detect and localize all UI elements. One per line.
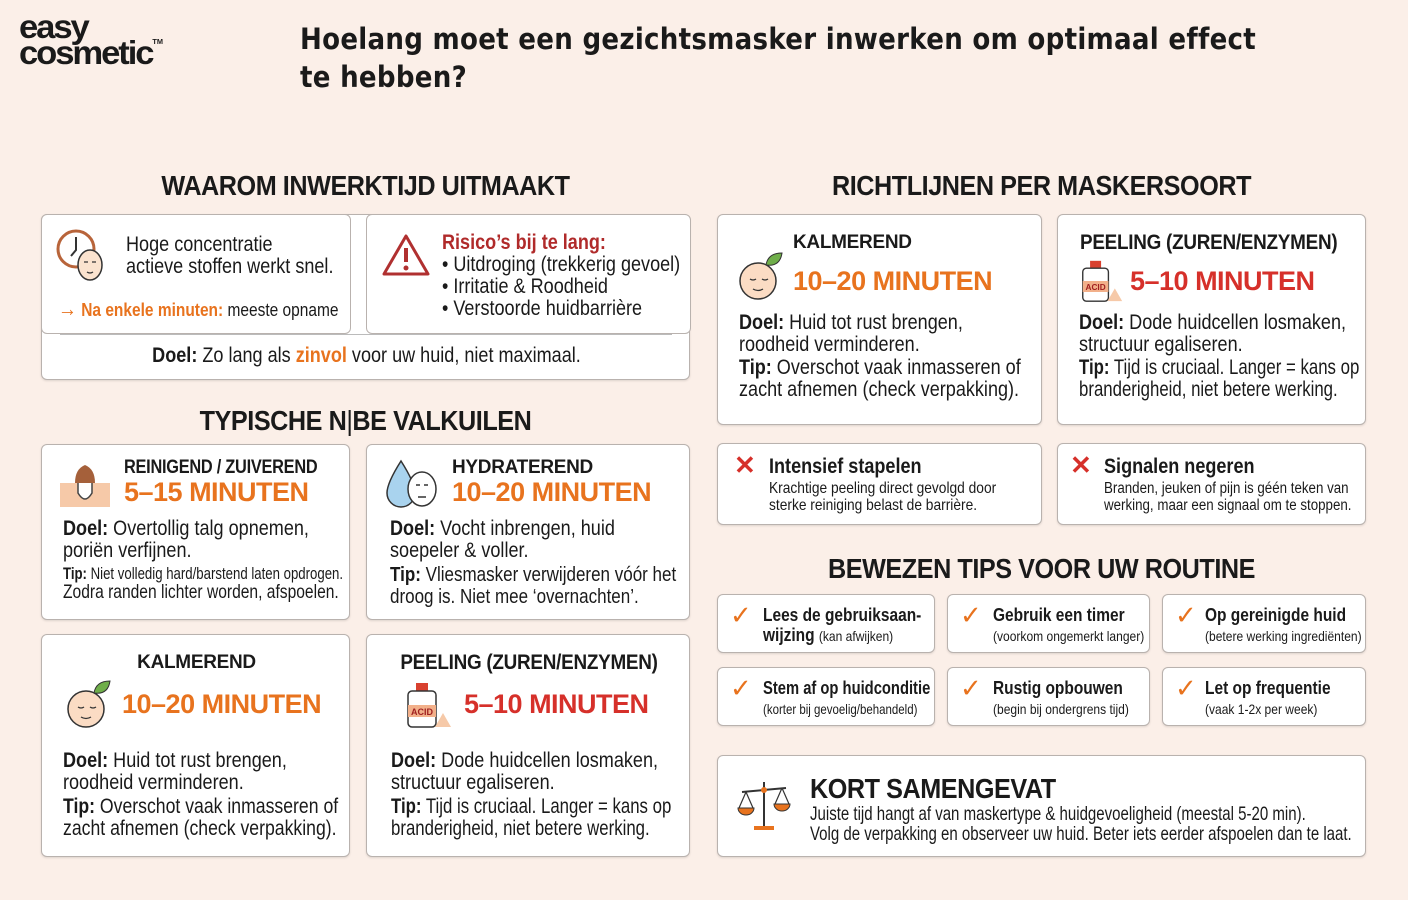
sub-card: concentratie xyxy=(40,214,350,334)
tip 1: ✓ xyxy=(730,601,752,631)
card: kalmerend left: Tip: Overschot vaak inmasseren of xyxy=(63,795,338,818)
card: kalmerend left: KALMEREND xyxy=(137,652,256,673)
tip 6: (vaak 1-2x per week) xyxy=(1205,701,1317,717)
card: reinigend: Zodra randen lichter worden, afspoelen. xyxy=(63,581,339,603)
icon: acid bottle: ACID xyxy=(1085,283,1106,292)
card: peeling left: 5–10 MINUTEN xyxy=(464,689,649,719)
panel: kort samengevat xyxy=(717,755,1366,857)
card: peeling left: Doel: Dode huidcellen losmaken, xyxy=(391,749,658,772)
tip 5: (begin bij ondergrens tijd) xyxy=(993,701,1129,717)
card: reinigend: poriën verfijnen. xyxy=(63,539,192,562)
logo: easy xyxy=(19,8,88,45)
card: hydraterend: 10–20 MINUTEN xyxy=(452,477,651,507)
icon: scales xyxy=(738,782,790,830)
card: kalmerend right: Tip: Overschot vaak inmasseren of xyxy=(739,356,1021,379)
card: intensief stapelen xyxy=(717,443,1042,525)
card: peeling right xyxy=(1057,214,1366,425)
title: Hoelang moet een gezichtsmasker inwerken om optimaal effect xyxy=(300,22,1256,56)
tip 3: (betere werking ingrediënten) xyxy=(1205,628,1362,644)
icon: face with leaf xyxy=(739,252,783,300)
card: peeling left: PEELING (ZUREN/ENZYMEN) xyxy=(400,651,658,674)
card: kalmerend right: zacht afnemen (check verpakking). xyxy=(739,378,1019,401)
tip 6: ✓ xyxy=(1175,674,1197,704)
card: reinigend: Tip: Niet volledig hard/barstend laten opdrogen. xyxy=(63,565,343,583)
tip 3: Op gereinigde huid xyxy=(1205,605,1346,625)
panel: kort samengevat: KORT SAMENGEVAT xyxy=(810,773,1056,804)
icon: acid bottle: ACID xyxy=(411,707,433,717)
panel: waarom xyxy=(41,214,690,380)
doel line: Doel: Zo lang als zinvol voor uw huid, niet maximaal. xyxy=(152,344,581,367)
card: intensief stapelen: Krachtige peeling direct gevolgd door xyxy=(769,480,996,497)
icon: face with leaf xyxy=(67,680,111,728)
card: kalmerend left xyxy=(41,634,350,857)
card: peeling left: structuur egaliseren. xyxy=(391,771,555,794)
title: te hebben? xyxy=(300,60,467,94)
tip 4: Stem af op huidconditie xyxy=(763,678,930,698)
card: reinigend: REINIGEND / ZUIVEREND xyxy=(124,457,317,478)
card: kalmerend left: 10–20 MINUTEN xyxy=(122,689,321,719)
text xyxy=(126,232,333,278)
tip 4: ✓ xyxy=(730,674,752,704)
tip 6: Let op frequentie xyxy=(1205,678,1331,698)
card: hydraterend: droog is. Niet mee ‘overnachten’. xyxy=(390,585,639,608)
icon: red x: ✕ xyxy=(734,450,756,480)
card: signalen negeren xyxy=(1057,443,1366,525)
card: kalmerend left: zacht afnemen (check verpakking). xyxy=(63,817,337,840)
tip 2: Gebruik een timer xyxy=(993,605,1125,625)
card: signalen negeren: Signalen negeren xyxy=(1104,455,1255,478)
card: peeling left: branderigheid, niet betere werking. xyxy=(391,817,650,840)
card: intensief stapelen: sterke reiniging belast de barrière. xyxy=(769,497,977,514)
tip 5: Rustig opbouwen xyxy=(993,678,1123,698)
card: peeling right: structuur egaliseren. xyxy=(1079,333,1243,356)
icon: red x: ✕ xyxy=(1070,450,1092,480)
card: kalmerend right: roodheid verminderen. xyxy=(739,333,920,356)
icon: drop and mask xyxy=(386,460,437,508)
card: intensief stapelen: Intensief stapelen xyxy=(769,455,922,478)
tip 2: ✓ xyxy=(960,601,982,631)
tip 2 xyxy=(947,594,1150,653)
card: peeling left xyxy=(366,634,690,857)
tip 4 xyxy=(717,667,935,726)
panel: kort samengevat: Juiste tijd hangt af van maskertype & huidgevoeligheid (meestal 5-20 min). xyxy=(810,803,1306,825)
arrow note: → Na enkele minuten: meeste opname xyxy=(58,296,338,320)
risks list: Risico’s bij te lang: xyxy=(442,230,606,254)
tip 4: (korter bij gevoelig/behandeld) xyxy=(763,701,917,717)
icon: warning xyxy=(382,234,430,276)
text: Hoge concentratie xyxy=(126,232,272,256)
title xyxy=(300,22,1256,94)
tip 1 xyxy=(717,594,935,653)
card: hydraterend: soepeler & voller. xyxy=(390,539,529,562)
card: kalmerend right: KALMEREND xyxy=(793,232,912,253)
text: actieve stoffen werkt snel. xyxy=(126,255,333,278)
icon: clay pore xyxy=(60,465,110,507)
card: kalmerend left: roodheid verminderen. xyxy=(63,771,244,794)
risks list: • Verstoorde huidbarrière xyxy=(442,296,642,320)
heading: valkuilen: TYPISCHE N|BE VALKUILEN xyxy=(200,405,531,436)
logo: cosmeticTM xyxy=(19,34,163,71)
heading: waarom: WAAROM INWERKTIJD UITMAAKT xyxy=(161,170,570,201)
card: kalmerend left: Doel: Huid tot rust brengen, xyxy=(63,749,287,772)
card: kalmerend right xyxy=(717,214,1042,425)
tip 5: ✓ xyxy=(960,674,982,704)
tip 6 xyxy=(1162,667,1366,726)
card: peeling right: PEELING (ZUREN/ENZYMEN) xyxy=(1080,231,1337,254)
card: peeling right: Tip: Tijd is cruciaal. Langer = kans op xyxy=(1079,356,1359,379)
tip 1: Lees de gebruiksaan- xyxy=(763,605,921,625)
card: peeling right: Doel: Dode huidcellen losmaken, xyxy=(1079,311,1346,334)
risks list xyxy=(442,230,680,320)
risks list: • Irritatie & Roodheid xyxy=(442,274,608,298)
card: reinigend xyxy=(41,444,350,620)
tip 3: ✓ xyxy=(1175,601,1197,631)
card: peeling left: Tip: Tijd is cruciaal. Langer = kans op xyxy=(391,795,671,818)
tip 1: wijzing (kan afwijken) xyxy=(763,625,893,645)
card: kalmerend right: 10–20 MINUTEN xyxy=(793,266,992,296)
card: kalmerend right: Doel: Huid tot rust brengen, xyxy=(739,311,963,334)
card: hydraterend: Tip: Vliesmasker verwijderen vóór het xyxy=(390,563,676,586)
tip 5 xyxy=(947,667,1150,726)
sub-card: risico xyxy=(366,214,691,334)
card: reinigend: Doel: Overtollig talg opnemen, xyxy=(63,517,309,540)
card: hydraterend: Doel: Vocht inbrengen, huid xyxy=(390,517,615,540)
icon: acid bottle xyxy=(407,683,451,728)
card: reinigend: 5–15 MINUTEN xyxy=(124,477,309,507)
icon: clock face xyxy=(56,230,103,281)
heading: tips: BEWEZEN TIPS VOOR UW ROUTINE xyxy=(828,553,1255,584)
card: hydraterend xyxy=(366,444,690,620)
panel: kort samengevat: Volg de verpakking en observeer uw huid. Beter iets eerder afspoelen dan te laat. xyxy=(810,823,1352,845)
card: peeling right: branderigheid, niet betere werking. xyxy=(1079,378,1338,401)
icon: acid bottle xyxy=(1082,260,1122,302)
card: peeling right: 5–10 MINUTEN xyxy=(1130,266,1315,296)
card: signalen negeren: werking, maar een signaal om te stoppen. xyxy=(1104,497,1351,514)
tip 3 xyxy=(1162,594,1366,653)
tip 2: (voorkom ongemerkt langer) xyxy=(993,628,1144,644)
card: hydraterend: HYDRATEREND xyxy=(452,457,593,478)
heading: richtlijnen: RICHTLIJNEN PER MASKERSOORT xyxy=(832,170,1251,201)
card: signalen negeren: Branden, jeuken of pijn is géén teken van xyxy=(1104,480,1349,497)
risks list: • Uitdroging (trekkerig gevoel) xyxy=(442,252,680,276)
logo xyxy=(19,8,163,71)
